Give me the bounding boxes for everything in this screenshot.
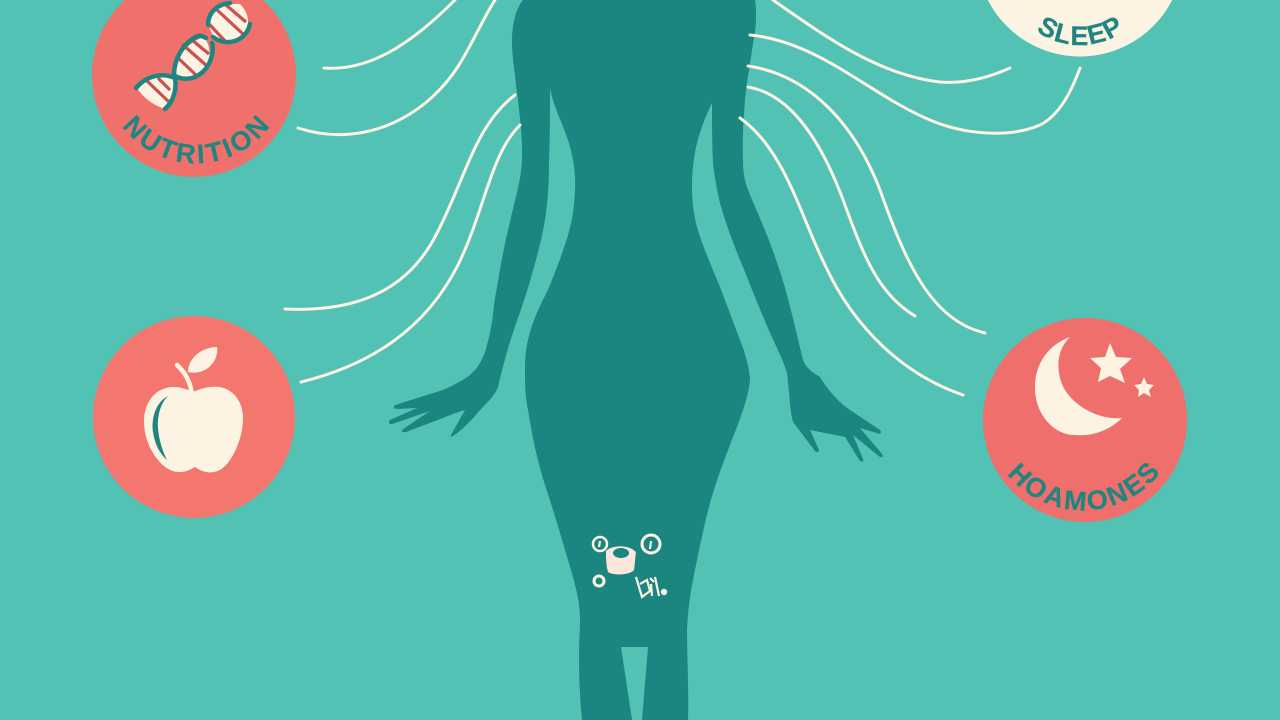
small dot	[661, 589, 667, 595]
icon: DNA helix	[136, 3, 250, 109]
line: upper right lower	[750, 35, 1080, 133]
squiggle glyphs	[599, 541, 659, 597]
cup opening	[613, 548, 629, 558]
small ring left	[593, 537, 607, 551]
line: right lower one	[740, 118, 963, 395]
circle: sleep	[988, 0, 1172, 56]
apple highlight	[153, 396, 168, 460]
line: upper left outer	[324, 0, 455, 68]
icon: molecule cluster on body	[593, 535, 667, 597]
icon: apple	[144, 347, 243, 472]
central cup	[606, 546, 636, 574]
line: mid left lower	[301, 125, 520, 382]
body silhouette	[389, 0, 883, 720]
small ring lower	[594, 576, 604, 586]
icon: large star	[1090, 343, 1132, 383]
sleep disc	[976, 0, 1184, 56]
apple stem	[177, 365, 192, 393]
icon: crescent moon	[1035, 337, 1122, 435]
hormones disc	[983, 318, 1187, 522]
label: NUTRITION: NUTRITION	[122, 114, 270, 164]
line: mid left upper	[285, 95, 515, 309]
small ring right	[642, 535, 660, 553]
line: upper left lower	[298, 0, 495, 135]
connector lines	[285, 0, 1080, 395]
icon: small star	[1134, 377, 1154, 397]
apple leaf	[188, 347, 217, 373]
line: right middle one	[748, 87, 915, 316]
apple disc	[93, 316, 295, 518]
label: SLEEP: SLEEP	[1038, 18, 1118, 46]
circle: hormones	[983, 318, 1187, 522]
label: HOAMONES: HOAMONES	[1008, 462, 1158, 511]
circle: nutrition	[92, 0, 296, 177]
line: upper right outer	[773, 0, 1010, 82]
line: right long one	[748, 66, 985, 333]
nutrition disc	[92, 0, 296, 177]
circle: apple	[93, 316, 295, 518]
apple body	[144, 387, 243, 472]
